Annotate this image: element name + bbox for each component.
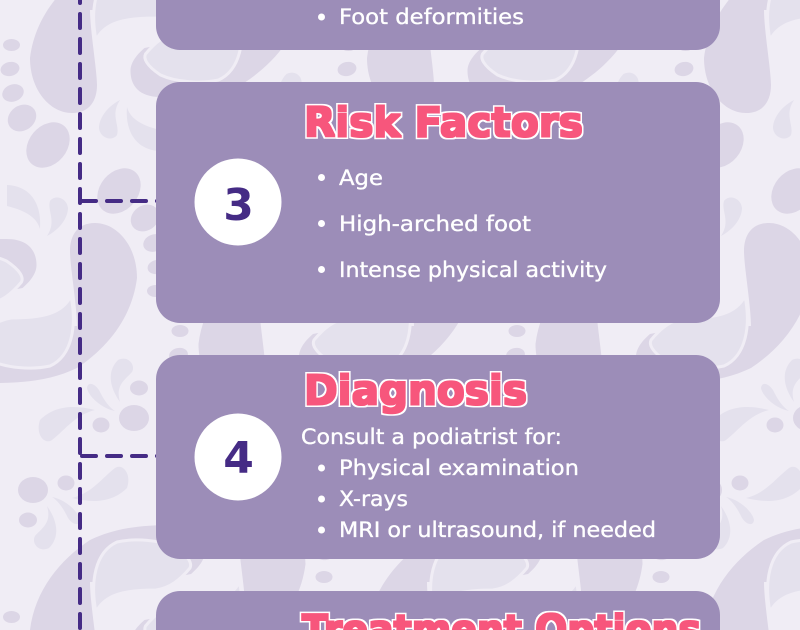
list: diagnosis steps: [318, 456, 656, 543]
icon: number 4 badge: 4: [223, 433, 254, 484]
panel: diagnosis: [156, 355, 720, 559]
timeline: dashed connectors: [80, 0, 160, 630]
text: consult intro: Consult a podiatrist for:: [301, 425, 562, 450]
list: risk factors: High-arched foot: [339, 212, 531, 237]
list: risk factors: Intense physical activity: [339, 258, 607, 283]
panel: risk factors: [156, 82, 720, 323]
heading: diagnosis: Diagnosis: [304, 366, 527, 414]
list: diagnosis steps: X-rays: [339, 487, 408, 512]
list: diagnosis steps: Physical examination: [339, 456, 579, 481]
list: risk factors: [318, 166, 607, 283]
list: diagnosis steps: MRI or ultrasound, if needed: [339, 518, 656, 543]
panel: previous section (foot deformities): [156, 0, 720, 50]
icon: number 3 badge: [194, 158, 282, 246]
heading: risk factors: Risk Factors: [304, 98, 583, 146]
icon: number 3 badge: 3: [223, 180, 254, 231]
list: risk factors: Age: [339, 166, 383, 191]
panel: treatment options: [156, 591, 720, 630]
icon: number 4 badge: [194, 414, 282, 500]
panel: previous section (foot deformities): Foot deformities: [339, 5, 524, 30]
